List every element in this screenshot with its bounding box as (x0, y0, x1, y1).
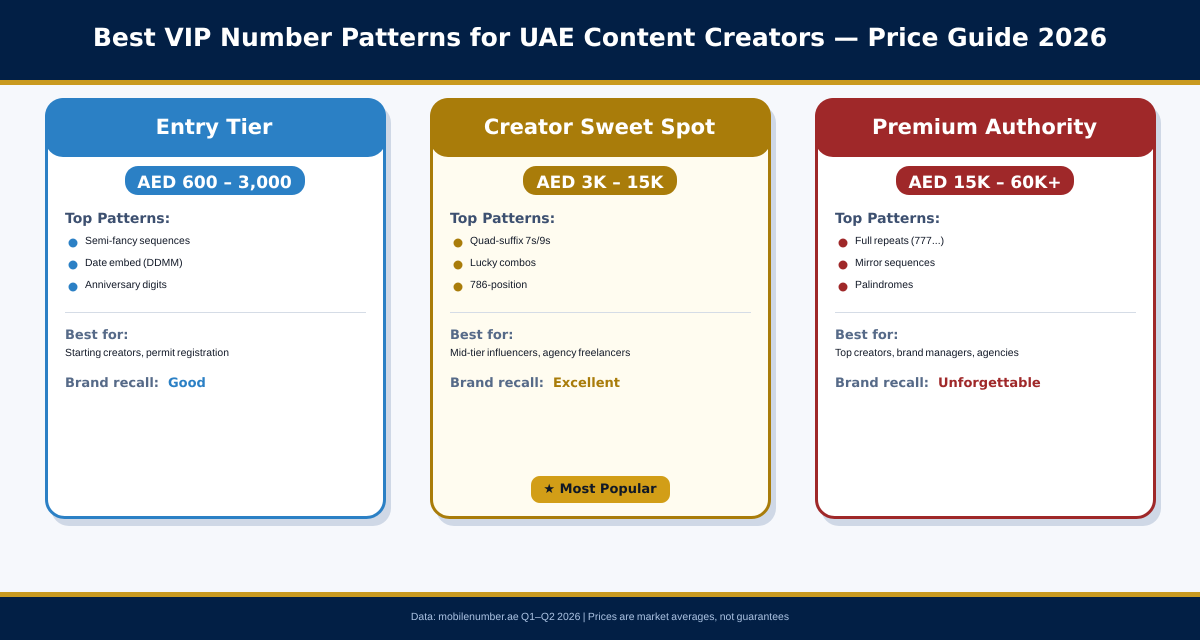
price badge: entry tier (125, 166, 305, 195)
top patterns list: premium authority (835, 211, 944, 292)
most popular badge: ★ Most Popular (543, 482, 657, 497)
top patterns list: entry tier: Semi-fancy sequences (85, 236, 190, 247)
most popular badge (531, 476, 670, 503)
best for: premium authority: Best for: (835, 328, 898, 343)
brand recall: entry tier: Good (168, 376, 206, 391)
best for: entry tier: Best for: (65, 328, 128, 343)
price badge: premium authority: AED 15K – 60K+ (908, 173, 1062, 193)
panel heading: entry tier (45, 98, 386, 157)
top patterns list: creator sweet spot (450, 211, 555, 292)
top patterns list: premium authority: Mirror sequences (855, 258, 935, 269)
top patterns list: entry tier: Date embed (DDMM) (85, 258, 183, 269)
price badge: creator sweet spot: AED 3K – 15K (537, 173, 664, 193)
brand recall: premium authority: Brand recall: (835, 376, 929, 391)
top patterns list: entry tier: Top Patterns: (65, 211, 170, 227)
best for: creator sweet spot: Best for: (450, 328, 513, 343)
top patterns list: creator sweet spot: Quad-suffix 7s/9s (470, 236, 551, 247)
top patterns list: entry tier (65, 211, 190, 292)
brand recall: creator sweet spot (450, 376, 620, 391)
best for: creator sweet spot: Mid-tier influencers, agency freelancers (450, 348, 630, 359)
panel heading: premium authority: Premium Authority (872, 115, 1097, 139)
panel heading: entry tier: Entry Tier (156, 115, 273, 139)
brand recall: premium authority (835, 376, 1041, 391)
price badge: creator sweet spot (523, 166, 677, 195)
best for: entry tier (65, 328, 229, 359)
panel: creator sweet spot (430, 98, 776, 526)
title: Best VIP Number Patterns for UAE Content Creators — Price Guide 2026 (93, 23, 1107, 52)
panel: entry tier (45, 98, 391, 526)
panel: premium authority (815, 98, 1161, 526)
brand recall: entry tier: Brand recall: (65, 376, 159, 391)
brand recall: premium authority: Unforgettable (938, 376, 1041, 391)
header band (0, 0, 1200, 85)
best for: creator sweet spot (450, 328, 630, 359)
top patterns list: premium authority: Full repeats (777...) (855, 236, 944, 247)
panel heading: creator sweet spot: Creator Sweet Spot (484, 115, 715, 139)
top patterns list: entry tier: Anniversary digits (85, 280, 167, 291)
footer note: Data: mobilenumber.ae Q1–Q2 2026 | Prices are market averages, not guarantees (411, 612, 789, 623)
price badge: premium authority (896, 166, 1074, 195)
footer band (0, 592, 1200, 640)
top patterns list: premium authority: Palindromes (855, 280, 913, 291)
top patterns list: premium authority: Top Patterns: (835, 211, 940, 227)
best for: premium authority (835, 328, 1019, 359)
best for: entry tier: Starting creators, permit registration (65, 348, 229, 359)
panel heading: premium authority (815, 98, 1156, 157)
top patterns list: creator sweet spot: Lucky combos (470, 258, 536, 269)
panel heading: creator sweet spot (430, 98, 771, 157)
brand recall: entry tier (65, 376, 206, 391)
top patterns list: creator sweet spot: 786-position (470, 280, 527, 291)
best for: premium authority: Top creators, brand managers, agencies (835, 348, 1019, 359)
brand recall: creator sweet spot: Excellent (553, 376, 620, 391)
top patterns list: creator sweet spot: Top Patterns: (450, 211, 555, 227)
price badge: entry tier: AED 600 – 3,000 (137, 173, 292, 193)
brand recall: creator sweet spot: Brand recall: (450, 376, 544, 391)
